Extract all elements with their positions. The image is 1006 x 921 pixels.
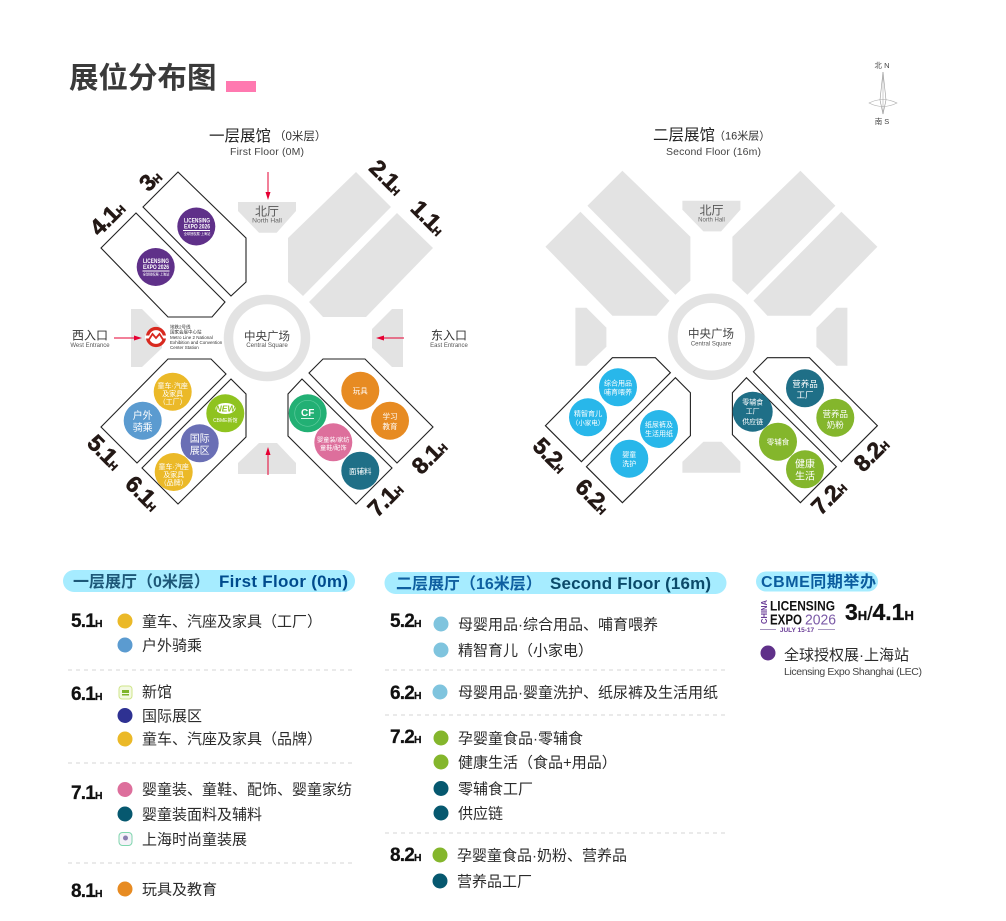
- 7.2H group: 供应链: [458, 804, 503, 822]
- logo: licensing expo 2026: EXPO: [770, 612, 802, 628]
- logo: licensing expo: 全球授权展·上海站: [184, 231, 211, 236]
- label 8.1H: 8.1H: [406, 434, 452, 479]
- label 5.2H: 5.2H: [528, 432, 573, 478]
- 8.2H group: [390, 845, 627, 890]
- west entrance hall: [131, 309, 162, 367]
- central square: Central Square: [246, 342, 288, 349]
- 5.2H group: 精智育儿（小家电）: [458, 642, 593, 660]
- zone: milk powder: [816, 399, 854, 437]
- logo: licensing expo 2026: LICENSING: [770, 598, 835, 614]
- logo: licensing expo: [177, 208, 215, 246]
- central square label: [688, 326, 734, 348]
- label 6.1H: 6.1H: [120, 470, 166, 516]
- north hall label: [698, 204, 725, 224]
- zone: outdoor cycling: [124, 402, 162, 440]
- hall labels second floor: [528, 431, 894, 520]
- label 1.1H: 1.1H: [406, 195, 451, 240]
- east entrance label: East Entrance: [430, 343, 469, 349]
- north hall label: 北厅: [699, 204, 724, 218]
- zone: nutrition factory: [786, 369, 824, 407]
- zone: outdoor cycling: 户外: [133, 409, 153, 422]
- 5.1H group: 5.1H: [71, 611, 102, 632]
- zone: stroller factory: 及家具: [162, 389, 183, 398]
- zone: nutrition factory: 工厂: [796, 390, 814, 400]
- 8.1H group: 8.1H: [71, 881, 102, 902]
- zone: learning: 教育: [382, 421, 398, 431]
- metro station text: Metro Line 2 National: [170, 335, 213, 340]
- zone: stroller factory: 童车·汽座: [158, 381, 188, 390]
- zone: healthy life: 健康: [795, 458, 815, 470]
- licensing expo item: [760, 646, 922, 678]
- label 3H: 3H: [134, 163, 167, 196]
- second floor heading: 二层展馆: [653, 126, 715, 144]
- zone: learning: 学习: [382, 411, 398, 421]
- logo: licensing expo: EXPO 2026: [143, 265, 170, 271]
- logo: licensing expo: LICENSING: [184, 218, 210, 224]
- zone: diapers: 生活用纸: [645, 429, 673, 438]
- 6.2H group: 母婴用品·婴童洗护、纸尿裤及生活用纸: [458, 684, 718, 702]
- central square label: Central Square: [691, 342, 732, 348]
- legend: second floor: [384, 572, 726, 890]
- 6.1H group: 国际展区: [142, 708, 202, 725]
- first floor heading: （0米层）: [274, 130, 326, 143]
- legend: first floor: [63, 570, 355, 902]
- hall labels first floor: [82, 154, 452, 522]
- first floor heading: 一层展馆: [209, 127, 271, 145]
- 6.2H group: [390, 683, 718, 704]
- zone: snack factory: 工厂: [746, 408, 760, 416]
- north hall: 北厅: [255, 204, 279, 218]
- second floor heading: （16米层）: [714, 130, 770, 142]
- zone: stroller factory: [154, 373, 192, 411]
- 5.1H group: 童车、汽座及家具（工厂）: [142, 612, 322, 630]
- zone: diapers: [640, 410, 678, 448]
- logo: licensing expo: [137, 248, 175, 286]
- zone: new hall: CBME新馆: [213, 417, 238, 424]
- zone: international: 展区: [190, 445, 210, 457]
- metro station text: Center Station: [170, 345, 199, 350]
- pill heading second floor: 二层展厅（16米层）: [396, 575, 542, 593]
- hall 6.1: [142, 379, 246, 504]
- hall 7.1: [288, 379, 392, 504]
- zone: stroller brand: [155, 453, 193, 491]
- zone: baby clothing: 童鞋/配饰: [320, 444, 347, 452]
- zone: diapers: 纸尿裤及: [645, 420, 673, 429]
- zone: new hall: NEW: [216, 404, 236, 414]
- icon: new hall: [119, 686, 132, 699]
- 8.2H group: 营养品工厂: [457, 874, 532, 890]
- logo: licensing expo 2026: CHINA: [760, 600, 769, 624]
- zone: snack factory: 零辅食: [742, 398, 763, 406]
- metro station text: 地铁2号线: [170, 324, 191, 330]
- pill heading first floor: 一层展厅（0米层）: [73, 573, 210, 591]
- zone: baby wash: 洗护: [622, 459, 636, 468]
- logo: licensing expo 2026: [760, 598, 836, 634]
- hall 1.1: [309, 213, 433, 317]
- 7.2H group: 7.2H: [390, 727, 421, 748]
- 5.1H group: [71, 611, 322, 654]
- first floor heading: [209, 127, 326, 158]
- hall 8.2: [753, 358, 877, 462]
- 6.1H group: [71, 684, 322, 748]
- north hall: [238, 202, 296, 233]
- 5.1H group: 户外骑乘: [142, 638, 202, 654]
- zone: milk powder: 奶粉: [827, 420, 844, 430]
- label 7.2H: 7.2H: [806, 474, 851, 520]
- zone: outdoor cycling: 骑乘: [133, 421, 153, 434]
- zone: baby clothing: [314, 423, 352, 461]
- second floor heading: [653, 126, 770, 158]
- logo: licensing expo: 全球授权展·上海站: [143, 272, 170, 276]
- zone: international: [181, 424, 219, 462]
- zone: stroller factory: （工厂）: [159, 398, 187, 406]
- 6.1H group: 童车、汽座及家具（品牌）: [142, 730, 322, 748]
- hall reference 3H/4.1H: 3H/4.1H: [845, 599, 914, 625]
- hall 4.1: [101, 213, 225, 317]
- arrow: east: [376, 336, 404, 340]
- pill heading first floor: [63, 570, 355, 592]
- zone: stroller brand: 及家具: [163, 470, 184, 479]
- licensing expo item: 全球授权展·上海站: [784, 646, 909, 664]
- pill heading second floor: Second Floor (16m): [550, 574, 711, 593]
- logo: licensing expo 2026: 2026: [805, 612, 836, 628]
- central square: 中央广场: [244, 329, 290, 343]
- 8.1H group: 玩具及教育: [142, 882, 217, 898]
- 5.2H group: [390, 611, 658, 660]
- zone: general: 综合用品: [604, 378, 632, 388]
- zone: smart parenting: （小家电）: [572, 418, 604, 427]
- zone: learning: [371, 402, 409, 440]
- hall 8.1: [309, 359, 433, 463]
- 7.2H group: [390, 727, 617, 822]
- hall 5.2: [545, 358, 670, 462]
- second floor map: [528, 171, 894, 520]
- zone: snack factory: 供应链: [742, 417, 763, 426]
- zone: stroller brand: 童车·汽座: [159, 462, 189, 471]
- zone: general: 哺育喂养: [604, 388, 632, 396]
- icon: compass: [869, 61, 897, 126]
- label 5.1H: 5.1H: [82, 429, 128, 475]
- logo: licensing expo 2026: JULY 15-17: [780, 627, 815, 634]
- zone: stroller brand: （品牌）: [160, 478, 188, 487]
- first floor heading: First Floor (0M): [230, 146, 304, 158]
- east entrance label: 东入口: [431, 328, 467, 342]
- south hall: [238, 443, 296, 474]
- label 7.1H: 7.1H: [362, 476, 408, 522]
- grey upper halls: [545, 171, 877, 473]
- east entrance label: [430, 328, 469, 349]
- zone: new hall: [206, 394, 244, 432]
- west entrance label: [70, 328, 110, 349]
- hall 5.1: [101, 359, 226, 463]
- 8.1H group: [71, 881, 217, 902]
- metro station text: [170, 324, 223, 350]
- 7.1H group: 婴童装、童鞋、配饰、婴童家纺: [142, 780, 352, 798]
- first floor map: [70, 154, 469, 522]
- 7.1H group: 上海时尚童装展: [142, 830, 247, 848]
- hall 3: [143, 172, 246, 296]
- label 6.2H: 6.2H: [570, 473, 616, 519]
- 6.2H group: 6.2H: [390, 683, 421, 704]
- zone: fabrics: 面辅料: [349, 466, 372, 476]
- arrow: west: [114, 336, 142, 340]
- 7.2H group: 孕婴童食品·零辅食: [458, 730, 583, 748]
- pill heading CBME: CBME同期举办: [761, 572, 876, 591]
- zone: baby clothing: 婴童装/家纺: [317, 436, 350, 444]
- zone: baby wash: [610, 440, 648, 478]
- logo: licensing expo: LICENSING: [143, 259, 169, 265]
- arrow: north: [266, 172, 270, 200]
- zone: general: [599, 368, 637, 406]
- zone: nutrition factory: 营养品: [792, 379, 818, 389]
- icon: compass: 南 S: [875, 116, 889, 126]
- north hall: North Hall: [252, 218, 282, 224]
- label 2.1H: 2.1H: [364, 154, 410, 200]
- zone: milk powder: 营养品: [823, 409, 848, 419]
- metro station text: Exhibition and Convention: [170, 340, 223, 345]
- central square label: 中央广场: [688, 326, 734, 340]
- hall 7.2: [732, 378, 836, 503]
- zone: baby wash: 婴童: [622, 450, 636, 459]
- north hall label: North Hall: [698, 218, 725, 224]
- logo: licensing expo: EXPO 2026: [184, 224, 211, 230]
- pill heading first floor: First Floor (0m): [219, 572, 348, 591]
- zone: snack factory: [733, 392, 773, 432]
- 6.1H group: 6.1H: [71, 684, 102, 705]
- 7.2H group: 健康生活（食品+用品）: [458, 754, 617, 772]
- 8.2H group: 孕婴童食品·奶粉、营养品: [457, 846, 627, 864]
- zone: snacks: 零辅食: [767, 436, 790, 446]
- label 4.1H: 4.1H: [84, 195, 130, 241]
- 5.2H group: 母婴用品·综合用品、哺育喂养: [458, 616, 658, 634]
- zone: healthy life: 生活: [795, 470, 815, 482]
- 7.2H group: 零辅食工厂: [458, 781, 533, 798]
- hall 2.1: [288, 172, 391, 296]
- 8.2H group: 8.2H: [390, 845, 421, 866]
- hall 6.2: [586, 378, 690, 503]
- licensing expo item: Licensing Expo Shanghai (LEC): [784, 666, 922, 678]
- zone: healthy life: [786, 450, 824, 488]
- icon: compass: 北 N: [874, 61, 890, 70]
- zone: smart parenting: 精智育儿: [574, 409, 602, 418]
- zone: children's fashion CF: CF: [301, 408, 314, 419]
- legend: concurrent event: [756, 572, 922, 678]
- east entrance hall: [372, 309, 403, 367]
- 7.1H group: 7.1H: [71, 783, 102, 804]
- 7.1H group: 婴童装面料及辅料: [142, 806, 262, 824]
- west entrance label: 西入口: [72, 328, 108, 342]
- label 8.2H: 8.2H: [848, 431, 894, 477]
- 6.1H group: 新馆: [142, 684, 172, 701]
- 5.2H group: 5.2H: [390, 611, 421, 632]
- metro station text: 国家会展中心站: [170, 328, 202, 336]
- icon: shanghai fashion: [119, 832, 132, 846]
- title: 展位分布图: [69, 62, 217, 95]
- zone: smart parenting: [569, 398, 607, 436]
- central square: [228, 300, 306, 376]
- 7.1H group: [71, 780, 352, 848]
- west entrance label: West Entrance: [70, 343, 110, 349]
- icon: metro logo: [145, 328, 167, 346]
- zone: toys: 玩具: [353, 386, 368, 396]
- second floor heading: Second Floor (16m): [666, 146, 761, 158]
- zone: international: 国际: [190, 433, 210, 445]
- arrow: south: [266, 447, 270, 475]
- pill heading second floor: [384, 572, 726, 594]
